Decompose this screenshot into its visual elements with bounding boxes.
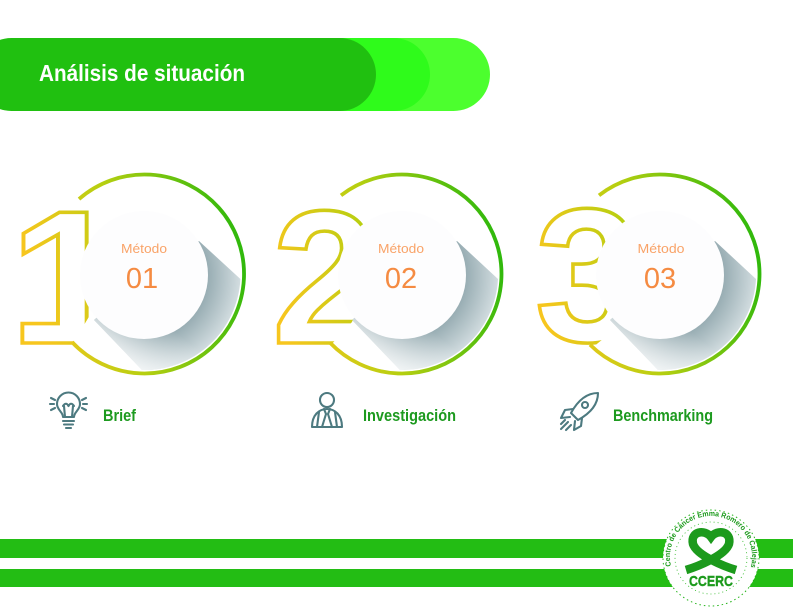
icon: light bulb [50, 392, 87, 428]
white disc [338, 211, 466, 339]
big number 1: 1 [9, 172, 125, 384]
label método: Método [121, 241, 167, 256]
panel: método 01 [9, 172, 244, 384]
icon: person with tie [312, 393, 342, 427]
number 03: 03 [644, 263, 676, 295]
long shadow [610, 241, 756, 370]
logo: CCERC [662, 510, 760, 606]
panel: método 03 [535, 170, 760, 382]
ring [72, 174, 244, 373]
footer stripes [0, 539, 793, 587]
label: investigación: Investigación [363, 406, 456, 425]
long shadow [94, 241, 240, 370]
title banner [0, 38, 490, 111]
big number 2: 2 [272, 172, 378, 384]
number 02: 02 [385, 263, 417, 295]
ring [590, 174, 760, 373]
heading: Análisis de situación [39, 60, 245, 86]
label método: Método [638, 241, 684, 256]
white disc [80, 211, 208, 339]
ring [330, 175, 501, 374]
label: benchmarking: Benchmarking [613, 406, 713, 425]
big number 3: 3 [535, 170, 641, 382]
logo circular text: Centro de Cáncer Emma Romero de Callejas [665, 512, 758, 568]
long shadow [352, 241, 498, 370]
ribbon [686, 532, 736, 570]
white disc [596, 211, 724, 339]
logo acronym: CCERC [689, 573, 733, 590]
number 01: 01 [126, 263, 158, 295]
icon: rocket [561, 393, 598, 430]
panel: método 02 [272, 172, 501, 384]
label método: Método [378, 241, 424, 256]
label: brief: Brief [103, 406, 136, 425]
